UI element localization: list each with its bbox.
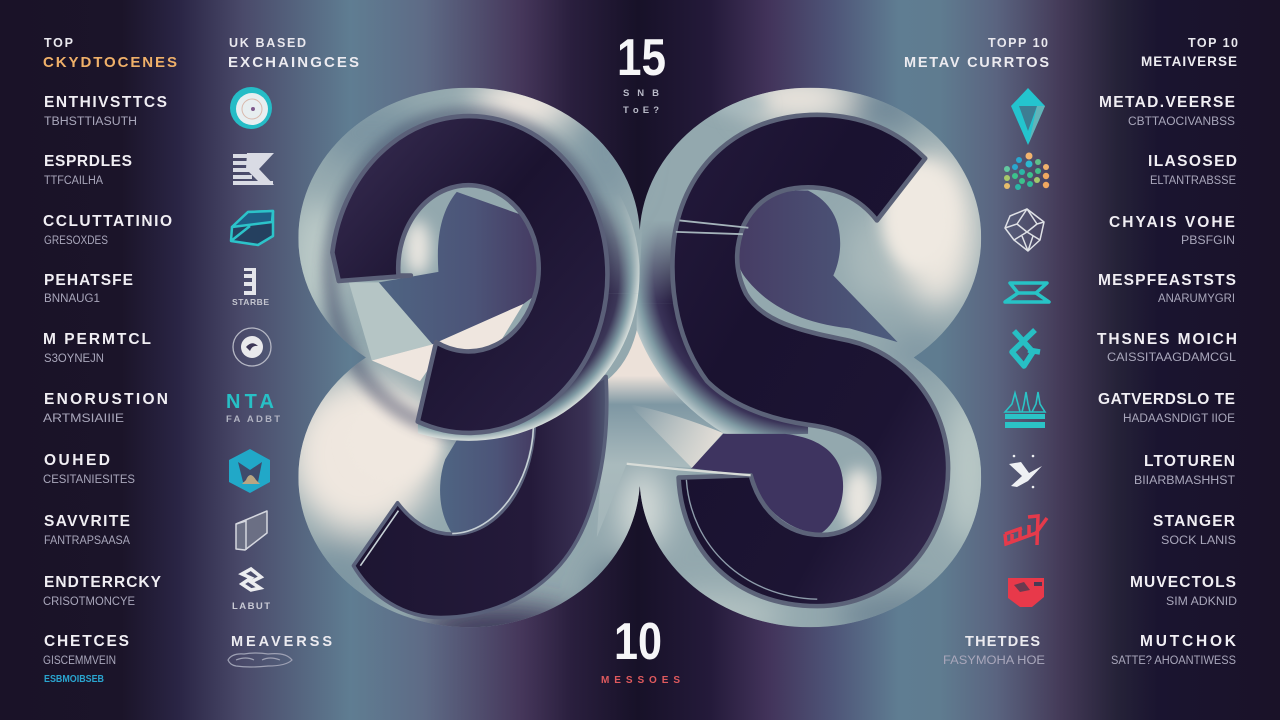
list rows: CESITANIESITES — [43, 474, 135, 486]
list rows: ILASOSED — [1148, 153, 1237, 170]
list rows: ENDTERRCKY — [44, 574, 162, 591]
center top number — [617, 29, 666, 116]
list rows: SIM ADKNID — [1166, 596, 1237, 608]
heading: UK BASED — [229, 36, 306, 50]
list rows: ELTANTRABSSE — [1150, 175, 1236, 187]
numeral S body — [672, 115, 948, 606]
icon: white geometric web — [1005, 209, 1044, 251]
list rows: PBSFGIN — [1181, 235, 1235, 247]
icon: swirl circle — [233, 328, 271, 366]
icon: S diamond: LABUT — [232, 601, 270, 612]
S lower outline highlight — [686, 480, 817, 599]
list rows: ARTMSIAIIIE — [43, 413, 124, 425]
icon: coloured dots — [1004, 152, 1049, 190]
list rows: TTFCAILHA — [44, 175, 103, 187]
list rows: GISCEMMVEIN — [43, 655, 116, 667]
list rows: ESPRDLES — [44, 153, 132, 170]
list rows: ESBMOIBSEB — [44, 674, 104, 685]
band around 9 bowl — [418, 202, 640, 441]
list rows: BIIARBMASHHST — [1134, 475, 1235, 487]
center top caption: S N B — [623, 88, 659, 99]
list rows: MESPFEASTSTS — [1098, 272, 1236, 289]
metallic ring base — [298, 88, 982, 628]
heading: CKYDTOCENES — [43, 54, 177, 71]
list rows: CCLUTTATINIO — [43, 213, 172, 230]
center bottom number — [601, 613, 680, 686]
list rows — [43, 94, 172, 685]
list rows: ANARUMYGRI — [1158, 293, 1235, 305]
heading: TOP 10 — [1188, 36, 1238, 50]
panel: UK based exchanges — [226, 36, 359, 667]
list rows: ENTHIVSTTCS — [44, 94, 167, 111]
panel: top metaverse list — [1097, 36, 1238, 667]
facet: pale wedge left of 9 — [349, 282, 432, 360]
numeral 9 lower tail — [353, 377, 607, 618]
list rows: GATVERDSLO TE — [1098, 391, 1235, 408]
text logo: NTA — [226, 391, 280, 425]
center bottom number: 10 — [614, 613, 662, 671]
list rows: BNNAUG1 — [44, 293, 100, 305]
list rows: CAISSITAAGDAMCGL — [1107, 352, 1237, 364]
text block: themes: FASYMOHA HOE — [943, 655, 1045, 667]
list rows: METAD.VEERSE — [1099, 94, 1235, 111]
hole: upper right counter — [737, 190, 898, 342]
icon: teal castle — [1005, 392, 1045, 428]
list rows: CHETCES — [44, 633, 129, 650]
icon: teal bow — [1005, 283, 1049, 302]
list rows: FANTRAPSAASA — [44, 535, 130, 547]
center top caption: T o E ? — [623, 105, 659, 116]
list rows: ENORUSTION — [44, 391, 168, 408]
list rows: S3OYNEJN — [44, 353, 104, 365]
center bottom caption: MESSOES — [601, 675, 680, 686]
icon: stacked bars with caption: STARBE — [232, 297, 269, 307]
list rows: SAVVRITE — [44, 513, 130, 530]
heading: METAIVERSE — [1141, 54, 1237, 69]
list rows: TBHSTTIASUTH — [44, 116, 137, 128]
heading: TOP — [44, 36, 73, 50]
center top caption — [623, 88, 659, 116]
metaverse label with cloud outline: MEAVERSS — [231, 634, 332, 650]
list rows: MUVECTOLS — [1130, 574, 1236, 591]
icon: S diamond — [232, 569, 270, 612]
facet: pale triangle under upper counter — [372, 304, 523, 381]
center top number: 15 — [617, 29, 666, 87]
text block: themes — [943, 634, 1045, 667]
icon: white star figure — [1009, 455, 1042, 488]
list rows: CBTTAOCIVANBSS — [1128, 116, 1235, 128]
icon: teal knot — [1012, 330, 1040, 366]
central numeral artwork: metallic 9 and S — [298, 88, 982, 628]
icon: outlined slab — [236, 511, 267, 550]
list rows: PEHATSFE — [44, 272, 133, 289]
soft shadow around 9 — [331, 115, 607, 432]
list rows: HADAASNDIGT IIOE — [1123, 413, 1235, 425]
list rows — [1097, 94, 1237, 667]
heading: METAV CURRTOS — [904, 55, 1049, 71]
S inner lip line — [676, 220, 748, 234]
icon: teal gem — [1011, 88, 1045, 145]
heading — [1141, 36, 1238, 69]
text logo: NTA: FA ADBT — [226, 414, 280, 425]
metaverse label with cloud outline — [228, 634, 332, 667]
panel: top cryptocurrencies list — [43, 36, 177, 685]
band along S left and lower curve — [636, 226, 808, 434]
numeral 9 upper bowl — [332, 116, 607, 433]
text logo: NTA: NTA — [226, 391, 274, 413]
icon: red shield — [1008, 578, 1044, 607]
icon: teal box — [231, 211, 273, 245]
hole: lower left counter — [440, 413, 535, 534]
icon: red emblem — [1005, 516, 1047, 545]
list rows: THSNES MOICH — [1097, 331, 1237, 348]
list rows: SOCK LANIS — [1161, 535, 1236, 547]
hole: lower right counter — [691, 434, 843, 533]
list rows: M PERMTCL — [43, 331, 151, 348]
icon: teal hexagon cube — [229, 449, 270, 493]
text block: themes: THETDES — [965, 634, 1040, 650]
list rows: CRISOTMONCYE — [43, 596, 135, 608]
list rows: MUTCHOK — [1140, 633, 1237, 650]
list rows: GRESOXDES — [44, 235, 108, 247]
facet: central pale shape — [597, 330, 723, 537]
icon: striped K — [233, 153, 274, 185]
cap top line — [627, 464, 751, 475]
heading: TOPP 10 — [988, 36, 1048, 50]
list rows: STANGER — [1153, 513, 1235, 530]
panel: metaverse currencies — [904, 36, 1049, 667]
list rows: CHYAIS VOHE — [1109, 214, 1235, 231]
heading — [228, 36, 359, 71]
icon: stacked bars with caption — [232, 268, 269, 307]
icon: teal ring — [230, 87, 272, 129]
list rows: SATTE? AHOANTIWESS — [1111, 655, 1236, 667]
heading — [43, 36, 177, 71]
hole: upper left counter — [379, 192, 537, 344]
list rows: LTOTUREN — [1144, 453, 1235, 470]
list rows: OUHED — [44, 452, 110, 469]
highlight on tail — [360, 427, 533, 566]
heading: EXCHAINGCES — [228, 54, 359, 71]
heading — [904, 36, 1049, 71]
